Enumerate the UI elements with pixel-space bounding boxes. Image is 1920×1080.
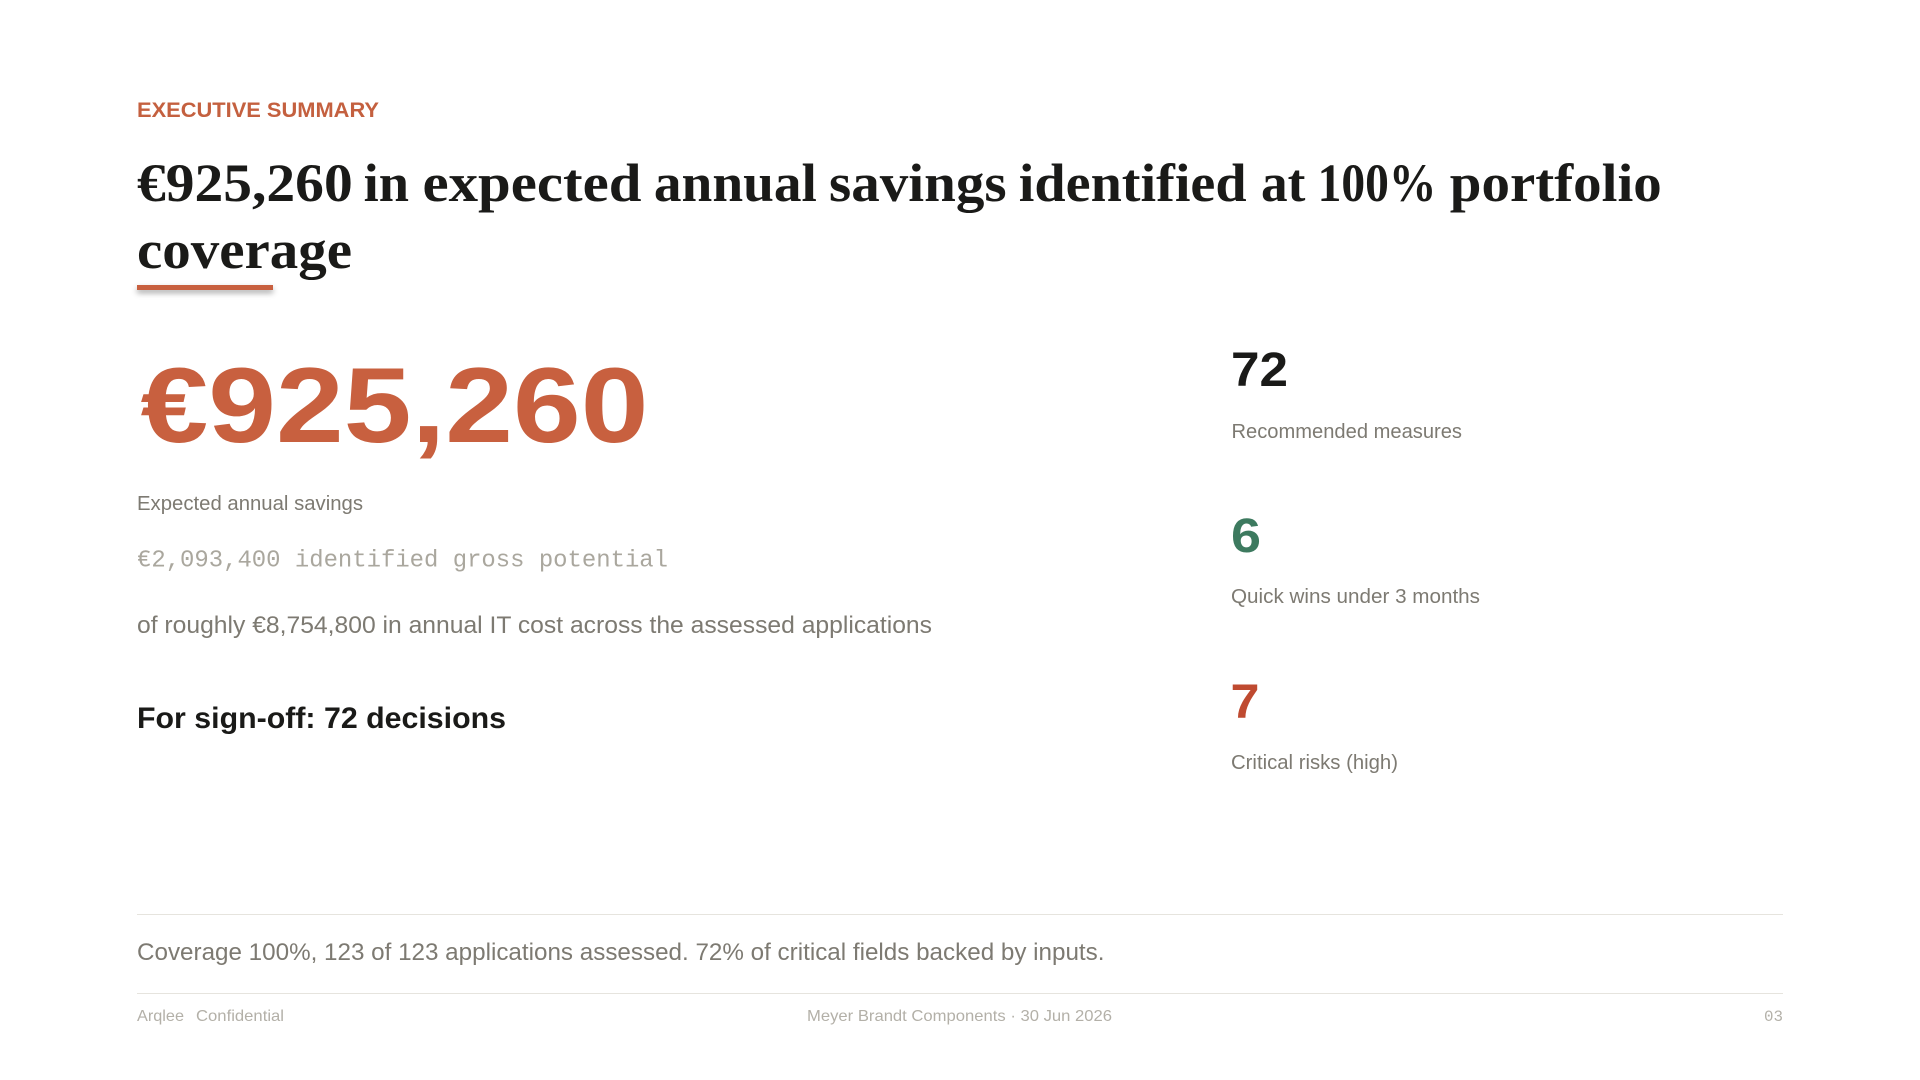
stat label: Recommended measures	[1232, 421, 1462, 443]
title	[137, 153, 1662, 280]
title line 1: at	[1261, 153, 1305, 213]
title line 1: expected	[422, 153, 642, 213]
hero figure: expected annual savings: €925,260	[140, 345, 648, 465]
footer	[137, 1008, 1783, 1026]
hero label: Expected annual savings	[137, 493, 363, 515]
title line 1: 100%	[1318, 153, 1436, 213]
stat label: Critical risks (high)	[1231, 752, 1398, 774]
sign-off callout: For sign-off: 72 decisions	[137, 702, 506, 735]
stat value 6: 6	[1231, 510, 1261, 563]
annual IT cost context: of roughly €8,754,800 in annual IT cost across the assessed applications	[137, 612, 932, 639]
title line 1: savings	[829, 153, 1007, 213]
coverage note: Coverage 100%, 123 of 123 applications assessed. 72% of critical fields backed by inputs.	[137, 939, 1104, 966]
stat value 7: 7	[1230, 676, 1260, 729]
gross potential line: €2,093,400 identified gross potential	[137, 548, 668, 574]
stat label: Quick wins under 3 months	[1231, 586, 1480, 608]
footer confidentiality: Confidential	[196, 1008, 284, 1025]
eyebrow: executive summary: EXECUTIVE SUMMARY	[137, 99, 379, 122]
stat: critical risks	[1230, 676, 1398, 774]
footer page number: 03	[1764, 1008, 1783, 1026]
title line 1: in	[364, 153, 409, 213]
title line 1: portfolio	[1450, 153, 1662, 213]
title line 1: annual	[654, 153, 817, 213]
stat: quick wins	[1231, 510, 1480, 608]
title accent underline	[137, 285, 273, 290]
stat value 72: 72	[1231, 344, 1288, 397]
title line 1: identified	[1019, 153, 1247, 213]
stat: recommended measures	[1231, 344, 1462, 443]
footer brand: Arqlee	[137, 1008, 184, 1025]
title line 2: coverage	[137, 220, 352, 280]
footer client and date: Meyer Brandt Components · 30 Jun 2026	[807, 1008, 1112, 1025]
title line 1	[137, 153, 1662, 213]
title line 1: €925,260	[137, 153, 353, 213]
